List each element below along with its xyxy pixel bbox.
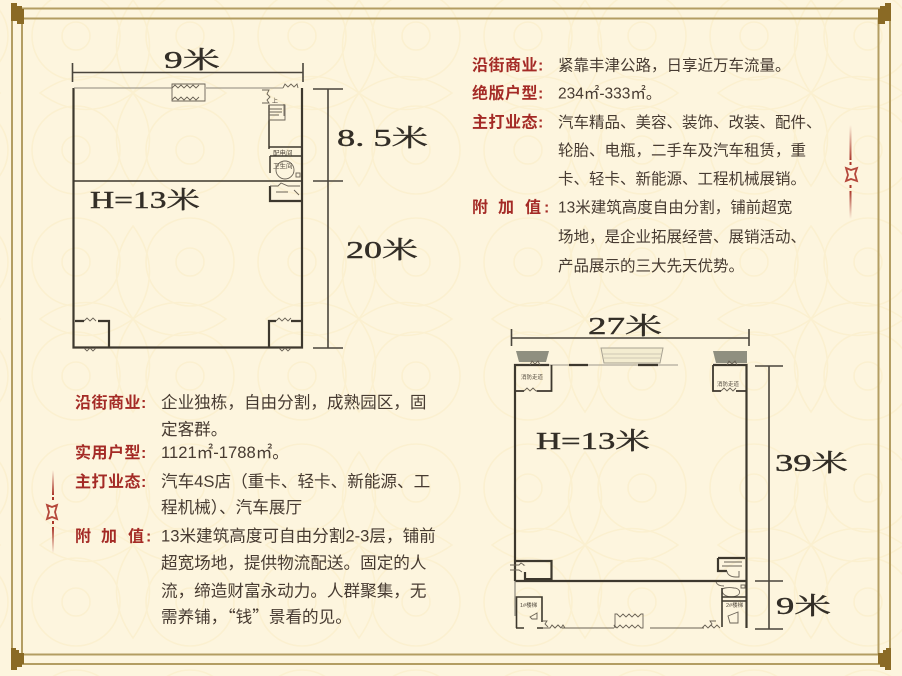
text block: small unit description: 主打业态: — [75, 472, 147, 491]
text block: small unit description: 超宽场地，提供物流配送。固定的人 — [161, 554, 426, 572]
plan walls — [510, 348, 747, 628]
floor plan: small unit — [72, 47, 428, 351]
plan walls: 消防走道 — [717, 380, 740, 388]
text block: large unit description: 主打业态: — [472, 112, 544, 132]
plan walls: 配电间 — [273, 148, 292, 157]
text block: small unit description: 13米建筑高度可自由分割2-3层，铺前 — [161, 526, 436, 546]
text block: small unit description: 汽车4S店（重卡、轻卡、新能源、工 — [161, 472, 430, 491]
text block: small unit description: 流，缔造财富永动力。人群聚集，无 — [161, 582, 426, 600]
text block: small unit description: 沿街商业: — [75, 394, 147, 412]
text block: small unit description: 需养铺，“钱”景看的见。 — [161, 604, 352, 628]
width dimension: 27米 — [512, 313, 749, 346]
text block: large unit description: 附加值: — [472, 198, 550, 216]
text block: small unit description: 企业独栋，自由分割，成熟园区，固 — [161, 393, 426, 412]
text block: large unit description: 产品展示的三大先天优势。 — [558, 257, 744, 275]
plan walls — [74, 84, 302, 351]
text block: large unit description: 13米建筑高度自由分割，铺前超宽 — [558, 198, 792, 216]
right red divider ornament — [846, 125, 857, 219]
left red divider ornament — [47, 470, 57, 553]
plan walls: 卫生间 — [273, 161, 292, 170]
text block: large unit description: 沿街商业: — [472, 56, 544, 74]
height dimension: 39米 and 9米: 9米 — [776, 593, 831, 620]
text block: large unit description: 绝版户型: — [472, 84, 544, 102]
text block: small unit description — [75, 393, 436, 628]
height note: H=13米 — [536, 428, 650, 455]
height dimension: 8.5米 and 20米: 8. 5米 — [337, 125, 428, 152]
plan walls: 2#楼梯 — [726, 601, 744, 609]
height dimension: 39米 and 9米: 39米 — [775, 450, 848, 477]
plan walls: 上 — [272, 97, 278, 105]
width dimension: 9米: 9米 — [164, 47, 220, 74]
width dimension: 27米: 27米 — [588, 313, 662, 340]
text block: large unit description — [472, 56, 822, 275]
text block: large unit description: 场地，是企业拓展经营、展销活动、 — [558, 228, 806, 246]
plan walls: 1#楼梯 — [520, 601, 538, 609]
text block: large unit description: 紧靠丰津公路，日享近万车流量。 — [558, 56, 791, 74]
text block: small unit description: 定客群。 — [161, 420, 227, 439]
text block: large unit description: 轮胎、电瓶，二手车及汽车租赁，重 — [558, 142, 806, 160]
width dimension: 9米 — [72, 47, 303, 82]
text block: small unit description: 附加值: — [75, 528, 152, 546]
text block: small unit description: 实用户型: — [75, 443, 147, 462]
plan walls: 消防走道 — [521, 373, 544, 381]
height dimension: 8.5米 and 20米: 20米 — [346, 237, 418, 264]
height dimension: 8.5米 and 20米 — [313, 89, 428, 348]
text block: small unit description: 1121㎡-1788㎡。 — [161, 443, 289, 462]
height dimension: 39米 and 9米 — [755, 366, 848, 629]
text block: large unit description: 汽车精品、美容、装饰、改装、配件、 — [558, 114, 822, 132]
height note: H=13米 — [90, 187, 200, 214]
text block: large unit description: 234㎡-333㎡。 — [558, 84, 661, 102]
text block: small unit description: 程机械）、汽车展厅 — [161, 498, 302, 517]
floor plan: large unit — [510, 313, 848, 629]
text block: large unit description: 卡、轻卡、新能源、工程机械展销。 — [558, 170, 806, 188]
